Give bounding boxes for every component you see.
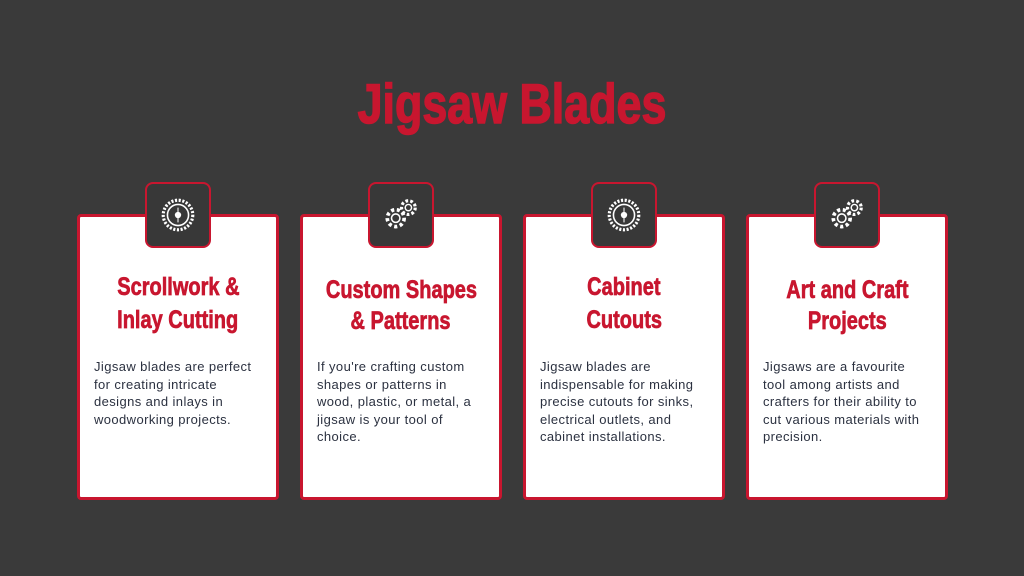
heading: Cutouts (586, 306, 662, 334)
heading: & Patterns (351, 307, 451, 335)
text: cut various materials with (763, 412, 919, 427)
icon: saw blade (591, 182, 657, 248)
text (763, 359, 919, 444)
text: precision. (763, 429, 823, 444)
icon: gears (814, 182, 880, 248)
text (540, 359, 693, 444)
heading: Custom Shapes (325, 276, 477, 304)
heading: Art and Craft (786, 276, 908, 304)
panel: scrollwork (77, 214, 279, 500)
text: woodworking projects. (94, 412, 231, 427)
icon: gears (368, 182, 434, 248)
heading (117, 273, 240, 334)
heading (325, 276, 477, 335)
text: crafters for their ability to (763, 394, 917, 409)
text: shapes or patterns in (317, 377, 447, 392)
text: If you're crafting custom (317, 359, 465, 374)
text: electrical outlets, and (540, 412, 671, 427)
text: precise cutouts for sinks, (540, 394, 693, 409)
text: tool among artists and (763, 377, 900, 392)
text: wood, plastic, or metal, a (317, 394, 471, 409)
text: jigsaw is your tool of (317, 412, 443, 427)
text: indispensable for making (540, 377, 693, 392)
heading (786, 276, 909, 335)
panel: art craft (746, 214, 948, 500)
text: choice. (317, 429, 361, 444)
text: Jigsaw blades are (540, 359, 651, 374)
icon: saw blade (145, 182, 211, 248)
heading (586, 273, 662, 334)
heading: Projects (808, 307, 886, 335)
text: designs and inlays in (94, 394, 223, 409)
text (94, 359, 251, 427)
heading: Cabinet (587, 273, 661, 301)
text: for creating intricate (94, 377, 217, 392)
text: cabinet installations. (540, 429, 666, 444)
text (316, 359, 471, 444)
text: Jigsaw blades are perfect (94, 359, 251, 374)
title: Jigsaw Blades (358, 72, 666, 135)
heading: Scrollwork & (117, 273, 239, 301)
panel: custom shapes (300, 214, 502, 500)
panel: cabinet (523, 214, 725, 500)
text: Jigsaws are a favourite (763, 359, 905, 374)
heading: Inlay Cutting (117, 306, 239, 334)
